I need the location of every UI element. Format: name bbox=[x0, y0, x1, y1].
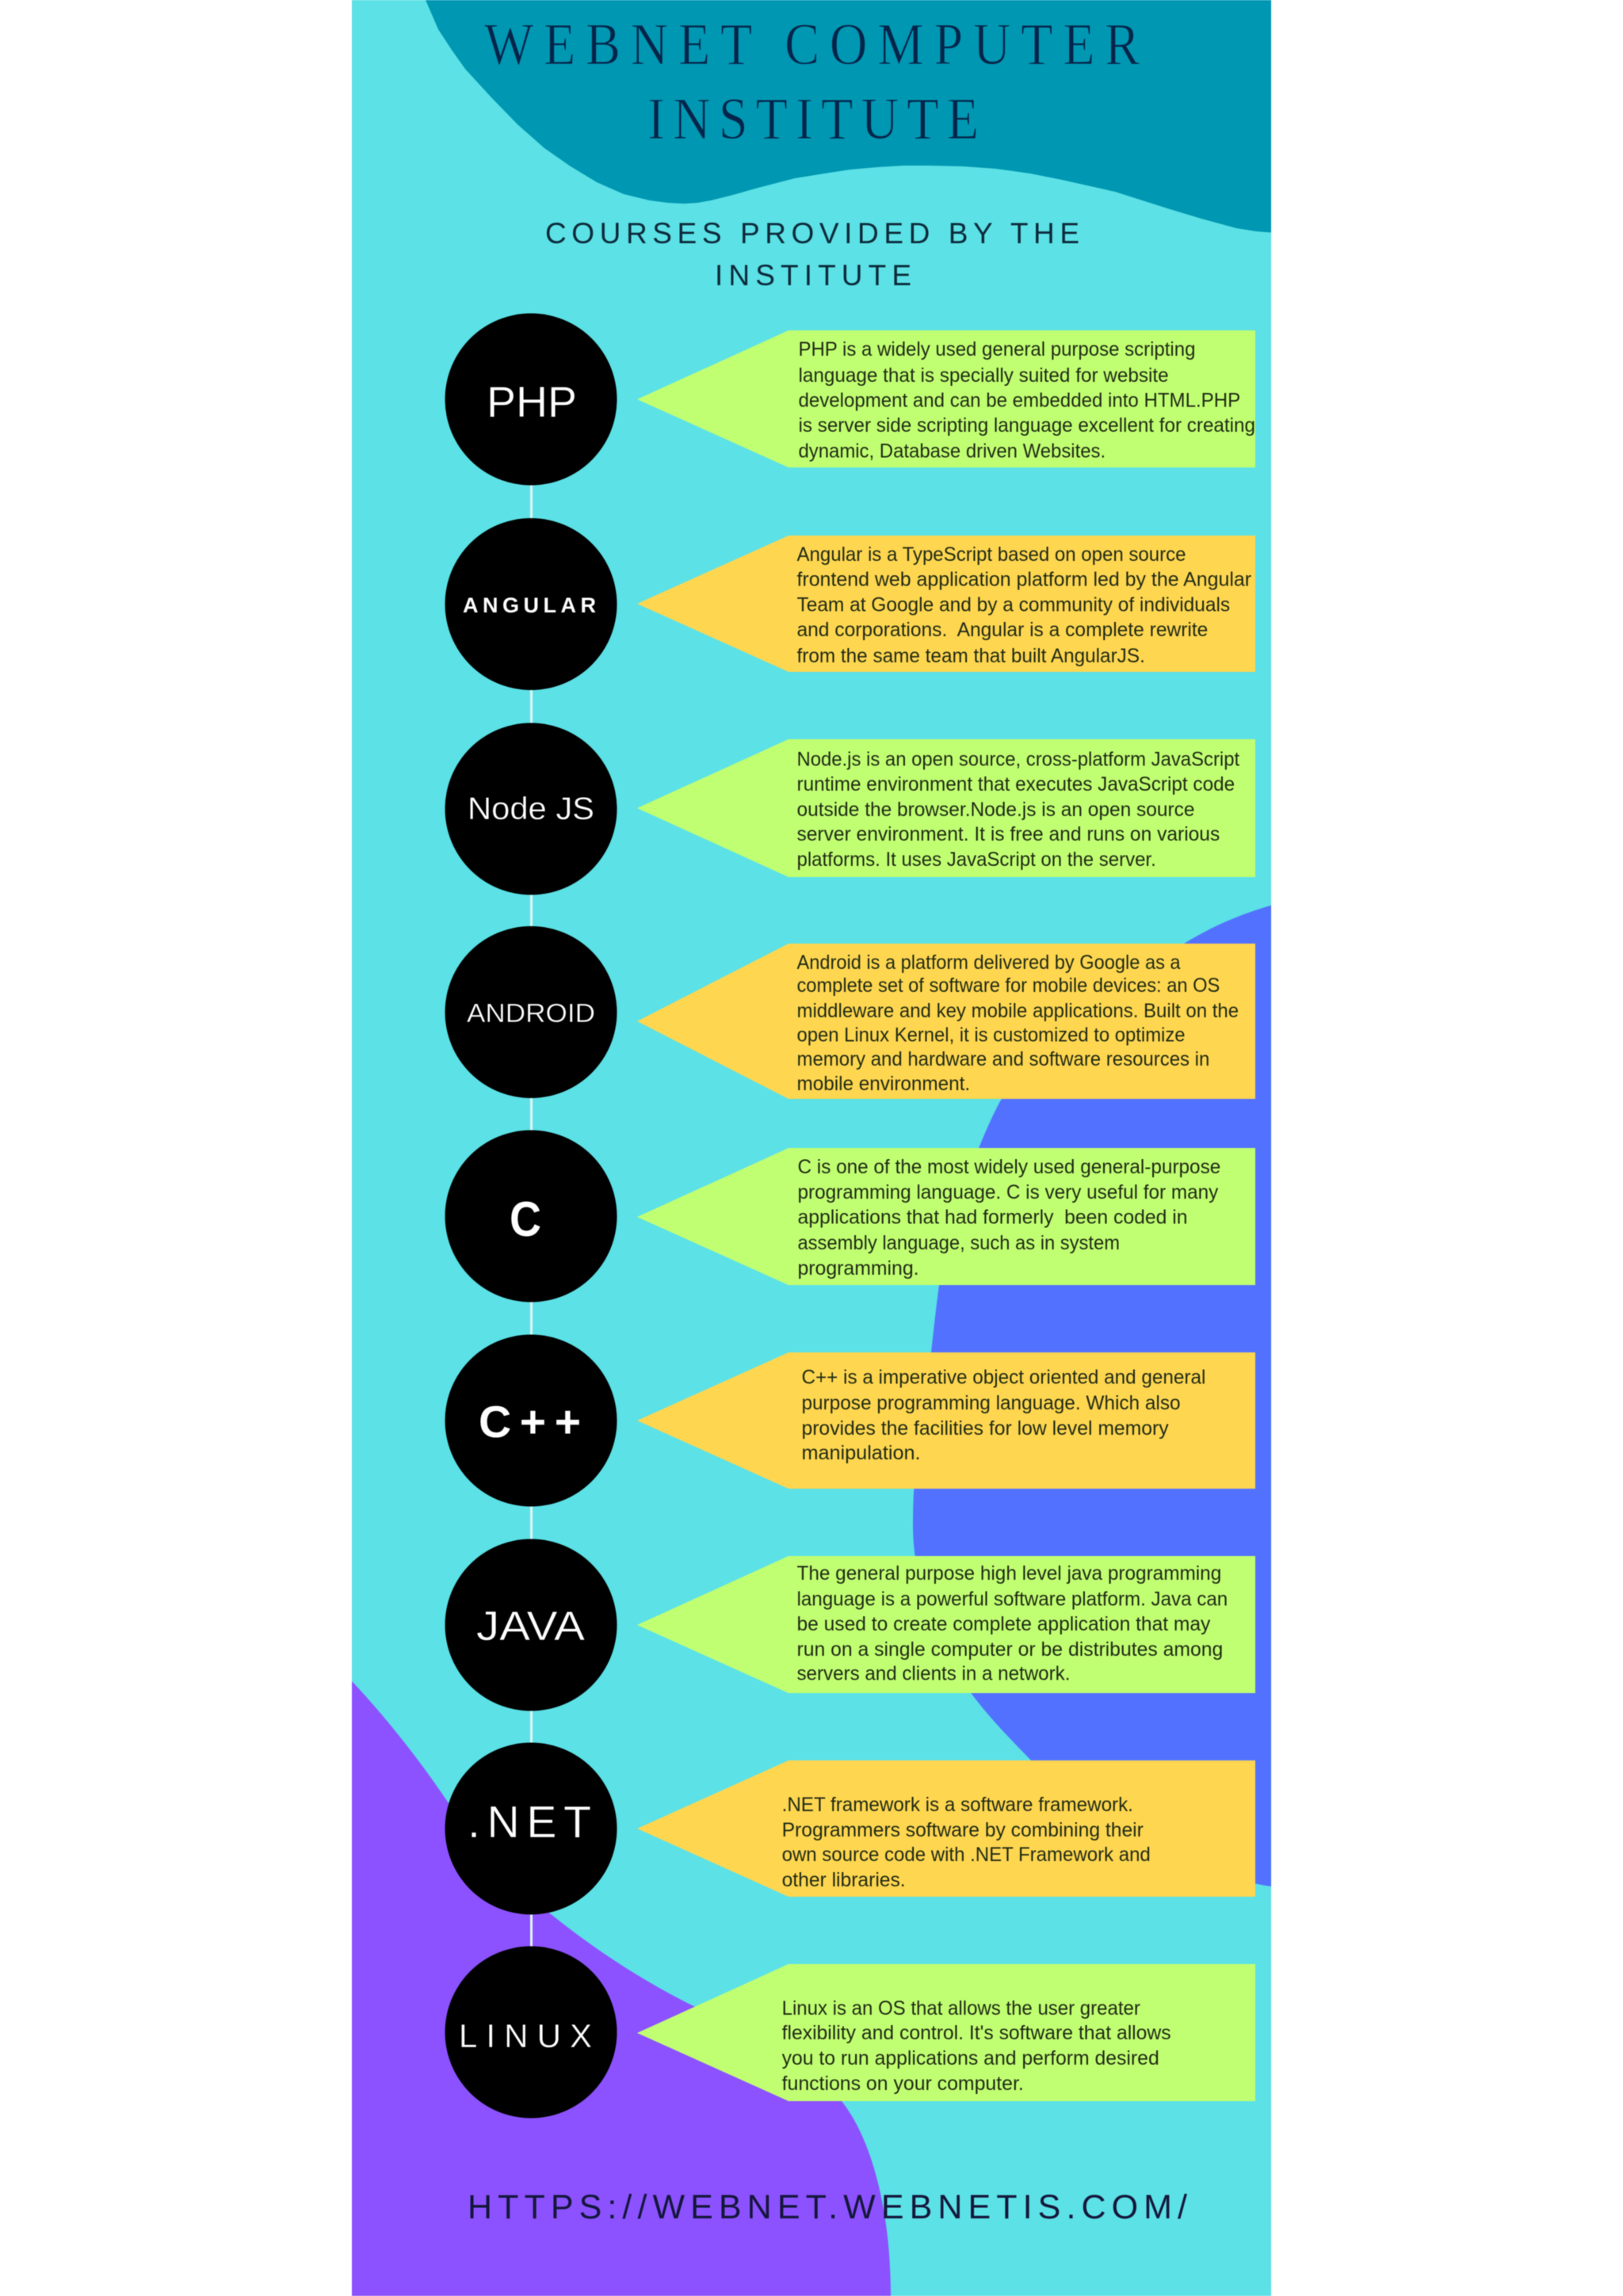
description: C bbox=[797, 1156, 1220, 1280]
description: PHP: PHP is a widely used general purpose scripting bbox=[798, 338, 1195, 360]
callout arrow: C++ bbox=[637, 1352, 1255, 1489]
subtitle: COURSES PROVIDED BY THE bbox=[545, 217, 1079, 250]
description: C: applications that had formerly been coded in bbox=[797, 1206, 1188, 1229]
description: .NET: .NET framework is a software framework. bbox=[782, 1794, 1133, 1816]
description: C++: purpose programming language. Which also bbox=[801, 1392, 1181, 1414]
description: PHP: development and can be embedded into HTML.PHP bbox=[798, 389, 1240, 412]
badge: C bbox=[445, 1130, 617, 1302]
badge: Linux bbox=[445, 1946, 617, 2119]
description: Java: run on a single computer or be distributes among bbox=[796, 1638, 1223, 1661]
description: Angular bbox=[796, 543, 1251, 667]
description: Node JS: Node.js is an open source, cross-platform JavaScript bbox=[796, 748, 1239, 771]
background panel with blobs bbox=[352, 0, 1276, 2296]
description: Linux: you to run applications and perform desired bbox=[782, 2047, 1159, 2069]
description: Java: be used to create complete application that may bbox=[796, 1613, 1211, 1635]
badge: Node JS: Node JS bbox=[468, 791, 594, 826]
callout arrow: Angular bbox=[637, 536, 1255, 672]
description: Angular: Team at Google and by a community of individuals bbox=[796, 593, 1230, 616]
badge: PHP bbox=[445, 314, 617, 485]
course: Angular bbox=[445, 518, 1255, 690]
badge: Android: ANDROID bbox=[467, 998, 595, 1028]
callout arrow: C bbox=[637, 1148, 1255, 1285]
description: .NET bbox=[782, 1794, 1151, 1891]
website url footer: HTTPS://WEBNET.WEBNETIS.COM/ bbox=[468, 2188, 1187, 2226]
badge: Java bbox=[445, 1539, 617, 1711]
course: C++ bbox=[445, 1334, 1255, 1507]
badge: Android bbox=[445, 926, 617, 1098]
description: .NET: Programmers software by combining their bbox=[782, 1819, 1144, 1841]
course: Java bbox=[445, 1539, 1255, 1711]
description: .NET: own source code with .NET Framework and bbox=[782, 1844, 1151, 1866]
description: C++: C++ is a imperative object oriented and general bbox=[801, 1366, 1205, 1389]
description: PHP: dynamic, Database driven Websites. bbox=[798, 440, 1106, 463]
description: C++: manipulation. bbox=[801, 1442, 921, 1464]
badge: PHP: PHP bbox=[487, 377, 577, 426]
badge: Angular bbox=[445, 518, 617, 690]
description: Node JS: outside the browser.Node.js is an open source bbox=[796, 799, 1194, 821]
description: Angular: frontend web application platform led by the Angular bbox=[796, 568, 1251, 591]
description: C: programming language. C is very useful for many bbox=[797, 1181, 1219, 1203]
badge: Node JS bbox=[445, 723, 617, 895]
badge: C++: C++ bbox=[479, 1397, 581, 1447]
course: .NET bbox=[445, 1743, 1255, 1914]
course: Android bbox=[445, 926, 1255, 1099]
description: Angular: from the same team that built AngularJS. bbox=[796, 645, 1145, 667]
description: Android: middleware and key mobile applications. Built on the bbox=[796, 1000, 1239, 1022]
bottom-left purple blob bbox=[352, 1681, 891, 2296]
description: Java: The general purpose high level java programming bbox=[796, 1562, 1221, 1585]
callout arrow: Linux bbox=[637, 1964, 1255, 2101]
description: Android: memory and hardware and software resources in bbox=[796, 1048, 1209, 1070]
description: Linux: flexibility and control. It's software that allows bbox=[782, 2022, 1171, 2044]
description: Android: mobile environment. bbox=[796, 1073, 970, 1095]
description: Android bbox=[796, 952, 1239, 1095]
description: Linux: Linux is an OS that allows the user greater bbox=[782, 1997, 1140, 2019]
description: C++ bbox=[801, 1366, 1205, 1464]
description: Node JS: server environment. It is free and runs on various bbox=[796, 823, 1220, 845]
connector line between circles bbox=[530, 399, 533, 2032]
callout arrow: Node JS bbox=[637, 739, 1255, 877]
badge: C: C bbox=[510, 1192, 541, 1247]
badge: .NET: .NET bbox=[468, 1797, 591, 1848]
course: Node JS bbox=[445, 723, 1255, 895]
description: Java bbox=[796, 1562, 1228, 1685]
description: .NET: other libraries. bbox=[782, 1869, 906, 1891]
infographic canvas bbox=[351, 0, 1272, 2296]
top teal blob bbox=[426, 0, 1276, 233]
title: WEBNET COMPUTER bbox=[484, 12, 1140, 78]
description: Node JS: platforms. It uses JavaScript on the server. bbox=[796, 849, 1156, 871]
badge: Java: JAVA bbox=[476, 1604, 585, 1650]
subtitle bbox=[545, 217, 1079, 292]
description: PHP bbox=[798, 338, 1255, 463]
description: Java: language is a powerful software platform. Java can bbox=[796, 1588, 1228, 1611]
description: Android: Android is a platform delivered by Google as a bbox=[796, 952, 1181, 974]
description: C: C is one of the most widely used general-purpose bbox=[797, 1156, 1220, 1178]
description: Linux: functions on your computer. bbox=[782, 2073, 1024, 2095]
description: Android: open Linux Kernel, it is customized to optimize bbox=[796, 1024, 1186, 1047]
callout arrow: Java bbox=[637, 1556, 1255, 1693]
callout arrow: PHP bbox=[637, 330, 1255, 467]
description: Node JS bbox=[796, 748, 1239, 871]
badge: .NET bbox=[445, 1743, 617, 1914]
description: Java: servers and clients in a network. bbox=[796, 1662, 1070, 1685]
description: Angular: Angular is a TypeScript based on open source bbox=[796, 543, 1186, 566]
course: Linux bbox=[445, 1946, 1255, 2119]
description: Android: complete set of software for mobile devices: an OS bbox=[796, 974, 1220, 997]
course: C bbox=[445, 1130, 1255, 1302]
title: INSTITUTE bbox=[647, 86, 979, 152]
callout arrow: Android bbox=[637, 944, 1255, 1099]
description: PHP: is server side scripting language excellent for creating bbox=[798, 414, 1255, 437]
title bbox=[484, 12, 1140, 152]
course: PHP bbox=[445, 314, 1255, 485]
badge: C++ bbox=[445, 1334, 617, 1507]
badge: Linux: LINUX bbox=[459, 2017, 592, 2054]
description: C++: provides the facilities for low level memory bbox=[801, 1417, 1169, 1440]
description: C: assembly language, such as in system bbox=[797, 1232, 1120, 1254]
description: Node JS: runtime environment that executes JavaScript code bbox=[796, 773, 1235, 795]
description: C: programming. bbox=[797, 1257, 919, 1280]
description: Linux bbox=[782, 1997, 1171, 2095]
callout arrow: .NET bbox=[637, 1760, 1255, 1897]
subtitle: INSTITUTE bbox=[715, 259, 911, 292]
description: PHP: language that is specially suited for website bbox=[798, 364, 1169, 387]
description: Angular: and corporations. Angular is a complete rewrite bbox=[796, 619, 1208, 641]
badge: Angular: ANGULAR bbox=[463, 593, 596, 617]
right blue blob bbox=[913, 904, 1276, 1887]
